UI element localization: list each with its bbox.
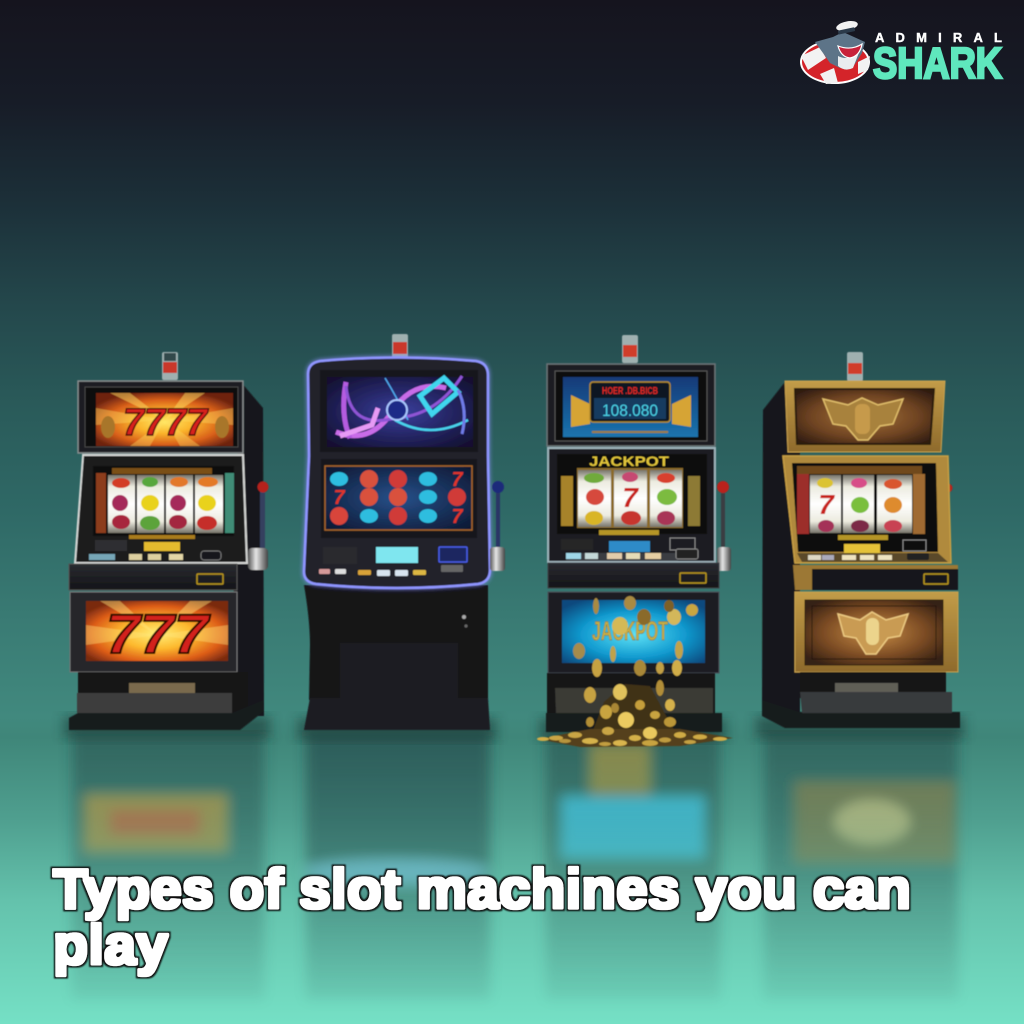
lever — [248, 482, 268, 570]
video reel grid — [321, 459, 477, 538]
machine 1: classic 7s slot — [69, 352, 268, 730]
coin tray — [800, 683, 952, 713]
beacon — [622, 335, 638, 363]
lever knob — [944, 484, 952, 492]
lever — [717, 481, 731, 571]
lever — [490, 481, 505, 571]
jackpot label: JACKPOT — [589, 453, 670, 469]
reel housing — [75, 455, 247, 563]
cabinet side — [762, 382, 800, 712]
buttons — [566, 549, 698, 561]
top artwork: 7777: 7777 — [123, 402, 209, 444]
body below panel — [547, 673, 715, 715]
console panel — [319, 547, 467, 576]
title — [53, 857, 911, 976]
coin panel ledge — [793, 565, 958, 590]
video reel grid: 7 — [451, 506, 463, 528]
top box with jackpot display — [547, 364, 715, 446]
lower jackpot artwork — [548, 592, 719, 673]
coin tray — [77, 683, 232, 713]
reel housing — [548, 448, 715, 562]
machine 2: modern video slot — [304, 334, 505, 730]
reels — [108, 475, 223, 533]
machine 3: jackpot slot — [537, 335, 733, 747]
coin panel ledge — [69, 564, 237, 590]
lower cabinet — [304, 585, 488, 700]
logo: Admiral Shark — [800, 19, 1002, 88]
video reel grid: 7 — [333, 487, 345, 509]
floor shadows — [64, 716, 964, 740]
lower artwork panel: 777: 777 — [106, 602, 211, 665]
top box — [78, 381, 243, 453]
plinth — [304, 698, 490, 730]
reels: 7 — [622, 482, 639, 513]
icon: shark on lifebuoy — [800, 19, 870, 84]
title: play — [53, 913, 168, 976]
coin panel ledge — [548, 563, 719, 588]
wordmark: ADMIRAL — [875, 30, 1002, 45]
reels — [561, 468, 700, 528]
video reel grid: 7 — [451, 469, 463, 491]
beacon — [392, 334, 408, 358]
top box with jackpot display: HOER .DB.BICB — [602, 386, 658, 397]
plinth — [69, 700, 263, 730]
top artwork: 7777 — [96, 393, 233, 446]
neon cabinet — [304, 358, 490, 588]
beacon — [847, 352, 863, 381]
top neon screen — [320, 370, 478, 452]
plinth — [762, 700, 960, 728]
body below panel — [800, 672, 946, 698]
buttons — [89, 551, 221, 560]
plinth — [546, 713, 722, 732]
floor reflections — [72, 732, 958, 1000]
reels — [810, 475, 912, 533]
top box — [785, 381, 945, 452]
machine 4: gold egyptian slot — [762, 352, 960, 728]
spilling coins — [537, 596, 733, 747]
top box with jackpot display: 108.080 — [602, 401, 658, 420]
reel housing — [783, 456, 951, 563]
lower jackpot artwork: JACKPOT — [592, 616, 668, 646]
reels: 7 — [818, 489, 835, 520]
cabinet side — [230, 381, 264, 716]
beacon — [162, 352, 178, 380]
coin tray — [555, 688, 713, 715]
lower artwork panel: 777 — [70, 592, 237, 672]
title: Types of slot machines you can — [53, 857, 911, 920]
body below panel — [78, 672, 248, 714]
lower bronze artwork — [795, 592, 958, 672]
buttons — [808, 553, 929, 560]
